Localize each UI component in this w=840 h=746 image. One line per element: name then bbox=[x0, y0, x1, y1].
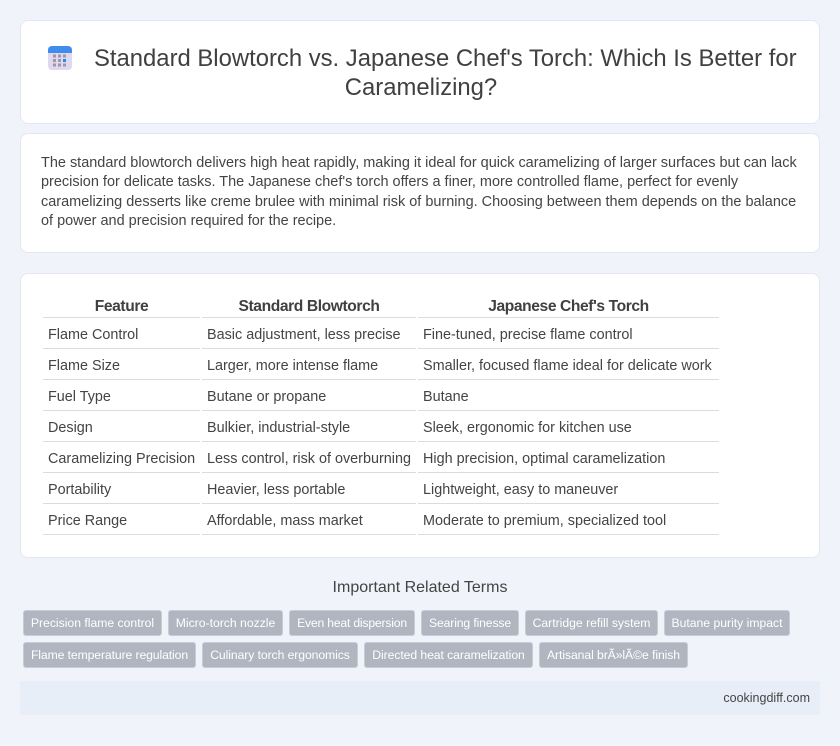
comparison table: Less control, risk of overburning bbox=[207, 451, 411, 467]
comparison table: Flame Control bbox=[48, 327, 138, 343]
comparison table: Caramelizing Precision bbox=[48, 451, 195, 467]
comparison table: High precision, optimal caramelization bbox=[423, 451, 665, 467]
comparison table: Butane or propane bbox=[207, 389, 326, 405]
comparison table: Lightweight, easy to maneuver bbox=[423, 482, 618, 498]
panel: comparison table card bbox=[20, 273, 820, 558]
text block: summary: caramelizing desserts like creme brulee with minimal risk of burning. Choosing between them depends on the balance bbox=[41, 194, 796, 210]
related term chips: Directed heat caramelization bbox=[372, 648, 525, 662]
comparison table: Affordable, mass market bbox=[207, 513, 363, 529]
footer source text: cookingdiff.com bbox=[723, 691, 810, 705]
title: Standard Blowtorch vs. Japanese Chef's Torch: Which Is Better for bbox=[94, 45, 797, 72]
comparison table: Japanese Chef's Torch bbox=[488, 298, 649, 315]
comparison table: Larger, more intense flame bbox=[207, 358, 378, 374]
related term chips: Butane purity impact bbox=[671, 616, 783, 630]
comparison table bbox=[43, 298, 719, 535]
comparison table: Smaller, focused flame ideal for delicate work bbox=[423, 358, 712, 374]
comparison table: Standard Blowtorch bbox=[239, 298, 379, 315]
comparison table: Bulkier, industrial-style bbox=[207, 420, 350, 436]
heading: related terms: Important Related Terms bbox=[333, 579, 507, 596]
related term chips: Flame temperature regulation bbox=[31, 648, 188, 662]
related term chips: Even heat dispersion bbox=[297, 616, 407, 630]
icon: calendar bbox=[48, 46, 72, 70]
comparison table: Design bbox=[48, 420, 93, 436]
title: Caramelizing? bbox=[345, 74, 497, 101]
comparison table: Heavier, less portable bbox=[207, 482, 345, 498]
footer bar bbox=[20, 681, 820, 715]
related term chips: Artisanal brÃ»lÃ©e finish bbox=[547, 648, 680, 662]
comparison table: Butane bbox=[423, 389, 469, 405]
related term chips: Searing finesse bbox=[429, 616, 511, 630]
comparison table: Fine-tuned, precise flame control bbox=[423, 327, 633, 343]
related term chips: Precision flame control bbox=[31, 616, 154, 630]
panel: title card bbox=[20, 20, 820, 124]
text block: summary: The standard blowtorch delivers high heat rapidly, making it ideal for quick caramelizing of larger surfaces but can lack bbox=[41, 155, 797, 171]
comparison table: Sleek, ergonomic for kitchen use bbox=[423, 420, 632, 436]
comparison table: Price Range bbox=[48, 513, 127, 529]
comparison table: Feature bbox=[95, 298, 148, 315]
related term chips: Culinary torch ergonomics bbox=[210, 648, 350, 662]
comparison table: Fuel Type bbox=[48, 389, 111, 405]
text block: summary: of power and precision required for the recipe. bbox=[41, 213, 336, 229]
comparison table: Portability bbox=[48, 482, 111, 498]
title bbox=[94, 45, 797, 101]
related term chips: Cartridge refill system bbox=[533, 616, 650, 630]
comparison table: Flame Size bbox=[48, 358, 120, 374]
comparison table: Moderate to premium, specialized tool bbox=[423, 513, 666, 529]
related term chips: Micro-torch nozzle bbox=[176, 616, 275, 630]
comparison table: Basic adjustment, less precise bbox=[207, 327, 401, 343]
panel: summary card bbox=[20, 133, 820, 253]
text block: summary: precision for delicate tasks. The Japanese chef's torch offers a finer, more controlled flame, perfect for evenly bbox=[41, 174, 738, 190]
text block: summary bbox=[41, 155, 797, 229]
related term chips bbox=[23, 610, 790, 668]
